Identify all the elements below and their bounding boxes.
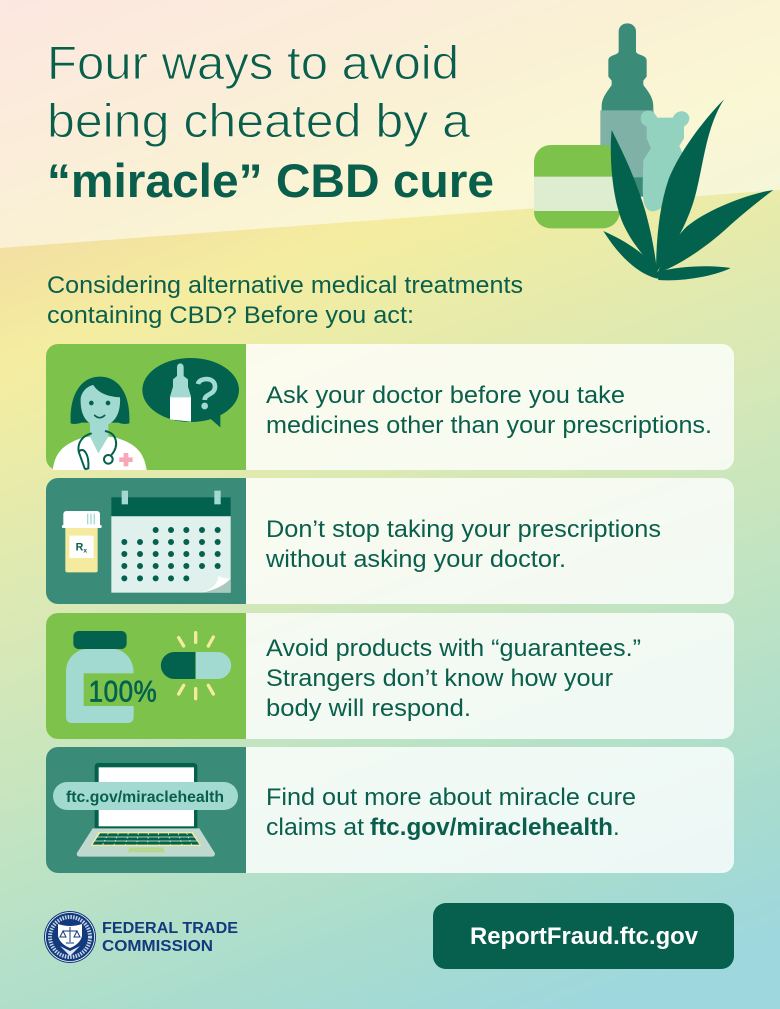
text: ask your doctor: medicines other than your prescriptions. bbox=[266, 412, 712, 439]
icon: FTC seal bbox=[44, 911, 96, 963]
icon: doctor with speech bubble bbox=[53, 358, 239, 470]
panel: keep taking prescriptions bbox=[46, 478, 734, 604]
icon: dropper bottle bbox=[600, 23, 654, 197]
text: find out more: . bbox=[613, 814, 620, 841]
text: find out more bbox=[266, 784, 636, 841]
title bbox=[47, 36, 494, 207]
icon: pill bottle and calendar: x bbox=[83, 547, 87, 554]
pale top band bbox=[0, 0, 780, 248]
text: avoid guarantees: Strangers don’t know how your bbox=[266, 665, 613, 692]
intro text bbox=[47, 272, 523, 329]
panel: avoid guarantees bbox=[46, 613, 734, 739]
logo: Federal Trade Commission: FEDERAL TRADE bbox=[102, 920, 238, 937]
text: ask your doctor: Ask your doctor before you take bbox=[266, 382, 625, 409]
text: find out more: Find out more about miracle cure bbox=[266, 784, 636, 811]
icon: gummy bear bbox=[641, 111, 689, 211]
button: ReportFraud.ftc.gov bbox=[433, 903, 734, 969]
icon: 100% bottle and pill: 100% bbox=[89, 676, 157, 709]
title: “miracle” CBD cure bbox=[47, 154, 494, 207]
icon: laptop with web address bbox=[77, 763, 215, 857]
text: avoid guarantees: Avoid products with “guarantees.” bbox=[266, 635, 641, 662]
title: Four ways to avoid bbox=[47, 36, 459, 89]
title: being cheated by a bbox=[47, 94, 471, 147]
text: keep taking prescriptions: without asking your doctor. bbox=[265, 546, 566, 573]
logo: Federal Trade Commission: COMMISSION bbox=[102, 938, 213, 955]
illustration: CBD products and leaf bbox=[534, 23, 773, 280]
button: ReportFraud.ftc.gov: ReportFraud.ftc.gov bbox=[470, 923, 699, 950]
text: find out more: claims at bbox=[266, 814, 364, 841]
logo: Federal Trade Commission bbox=[44, 911, 238, 963]
text: find out more: ftc.gov/miraclehealth bbox=[370, 814, 613, 841]
text: avoid guarantees: body will respond. bbox=[266, 695, 471, 722]
icon: pill bottle and calendar bbox=[62, 491, 231, 593]
address pill bbox=[53, 782, 238, 810]
panel: ask your doctor bbox=[46, 344, 734, 470]
intro text: containing CBD? Before you act: bbox=[47, 302, 414, 329]
icon: 100% bottle and pill bbox=[66, 631, 231, 723]
address pill: ftc.gov/miraclehealth bbox=[66, 789, 224, 806]
panel: find out more bbox=[46, 747, 734, 873]
text: avoid guarantees bbox=[266, 635, 641, 722]
icon: pill bottle and calendar: R bbox=[76, 541, 83, 553]
intro text: Considering alternative medical treatments bbox=[47, 272, 523, 299]
text: ask your doctor bbox=[266, 382, 712, 439]
icon: cannabis leaf bbox=[603, 99, 773, 280]
icon: cream jar bbox=[534, 145, 620, 228]
text: keep taking prescriptions: Don’t stop taking your prescriptions bbox=[266, 516, 661, 543]
text: keep taking prescriptions bbox=[265, 516, 661, 573]
